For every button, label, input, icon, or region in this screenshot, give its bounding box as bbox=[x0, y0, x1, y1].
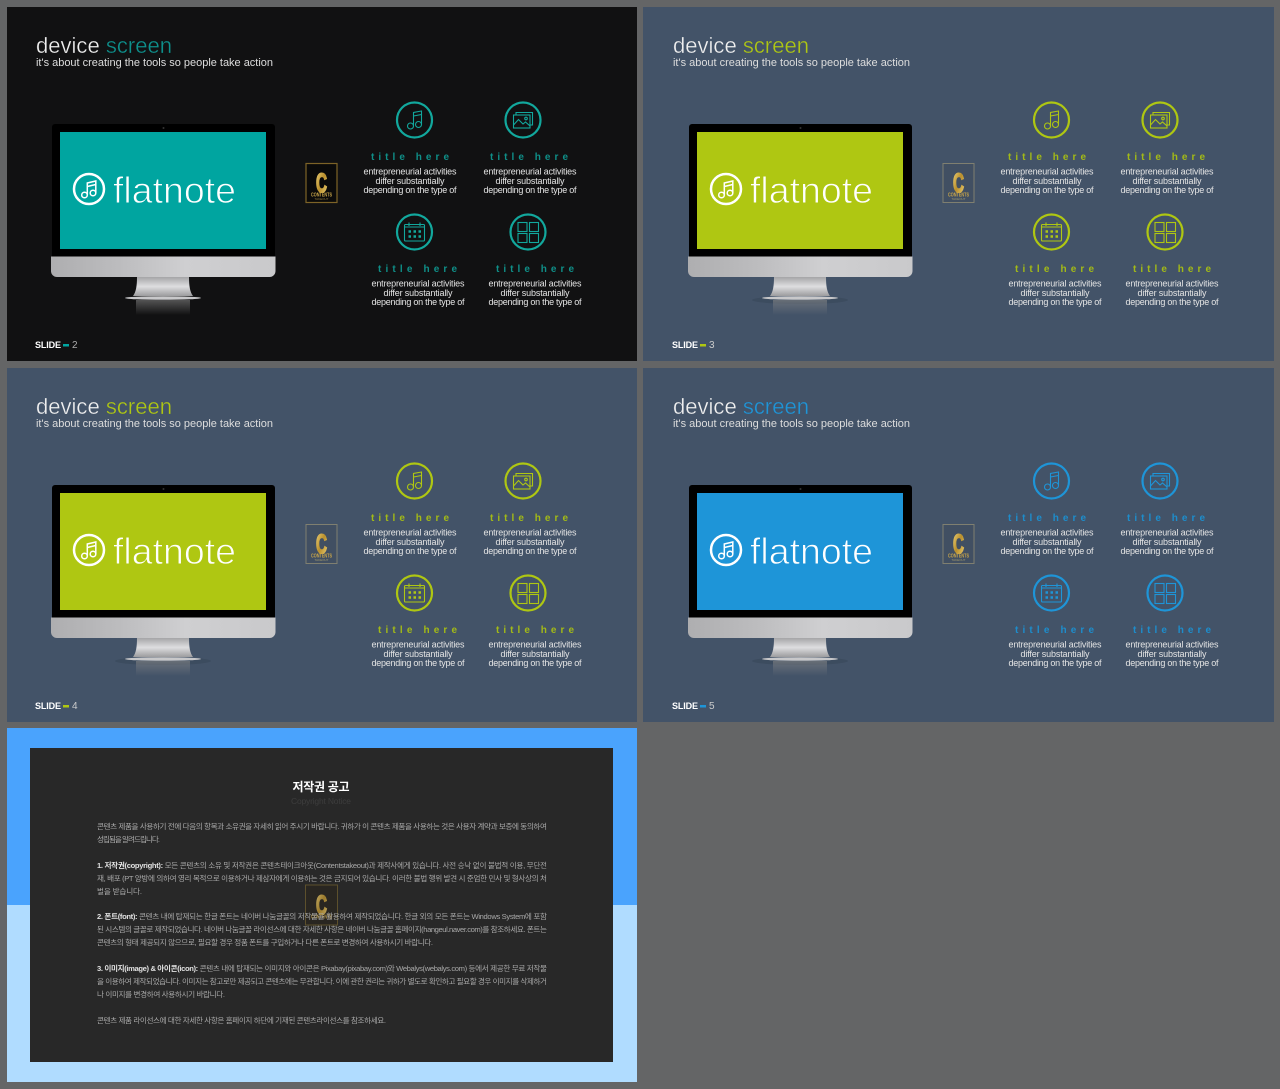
feature: calendar: title here bbox=[1015, 625, 1094, 636]
feature: calendar bbox=[372, 214, 465, 307]
feature: calendar: title here bbox=[378, 264, 457, 275]
feature: calendar: title here bbox=[1015, 264, 1094, 275]
monitor bbox=[51, 485, 276, 676]
panel: slide 2 teal on black bbox=[7, 7, 637, 361]
slide number: SLIDE bbox=[672, 701, 698, 711]
feature: image bbox=[1120, 464, 1214, 556]
notice subheading: Copyright Notice bbox=[291, 796, 351, 806]
watermark badge bbox=[306, 164, 337, 202]
feature: music: depending on the type of bbox=[1000, 546, 1094, 556]
notice section 2: 콘텐츠의 형태 제공되지 않으므로, 필요할 경우 정품 폰트를 구입하거나 다른 폰트로 변경하여 사용하시기 바랍니다. bbox=[97, 937, 433, 947]
watermark badge: TAKEOUT bbox=[314, 558, 329, 562]
feature: image: entrepreneurial activities bbox=[1120, 166, 1214, 176]
panel: slide 4 lime on slate bbox=[7, 368, 637, 722]
feature: music bbox=[1000, 464, 1094, 556]
feature: calendar: entrepreneurial activities bbox=[372, 640, 465, 650]
feature: music: depending on the type of bbox=[364, 546, 457, 556]
slide number: SLIDE bbox=[35, 701, 61, 711]
panel: slide 5 blue on slate bbox=[643, 368, 1274, 722]
feature: grid: title here bbox=[496, 625, 574, 636]
feature: image bbox=[1120, 102, 1214, 195]
feature: music: differ substantially bbox=[376, 537, 445, 547]
feature: grid: depending on the type of bbox=[1126, 658, 1219, 668]
feature: grid: differ substantially bbox=[1138, 288, 1207, 298]
feature: calendar bbox=[372, 576, 465, 668]
feature: image: title here bbox=[490, 513, 568, 524]
feature: calendar: depending on the type of bbox=[372, 658, 465, 668]
feature: image: title here bbox=[490, 152, 568, 163]
feature: calendar: entrepreneurial activities bbox=[1008, 640, 1102, 650]
notice footer line: 콘텐츠 제품 라이선스에 대한 자세한 사항은 홈페이지 하단에 기재된 콘텐츠라이선스를 참조하세요. bbox=[97, 1015, 386, 1025]
feature: music: differ substantially bbox=[376, 176, 445, 186]
watermark badge: CONTENTS bbox=[948, 554, 970, 560]
feature: music: entrepreneurial activities bbox=[1000, 166, 1094, 176]
watermark badge: TAKEOUT bbox=[952, 558, 966, 562]
notice section 2: 된 시스템의 글꼴로 제작되었습니다. 네이버 나눔글꼴 라이선스에 대한 자세한 사항은 네이버 나눔글꼴 홈페이지(hangeul.naver.com)를 참조하세요. 폰트는 bbox=[97, 924, 547, 934]
feature: image: differ substantially bbox=[1132, 176, 1202, 186]
feature: grid: entrepreneurial activities bbox=[488, 640, 582, 650]
subtitle: it's about creating the tools so people take action bbox=[36, 418, 273, 430]
slide number bbox=[35, 701, 78, 712]
notice heading: 저작권 공고 bbox=[292, 779, 350, 794]
watermark badge: CONTENTS bbox=[311, 914, 333, 920]
notice section 3: 을 이용하여 제작되었습니다. 이미지는 참고로만 제공되고 콘텐츠에는 무관합니다. 이에 관한 권리는 귀하가 별도로 확인하고 필요할 경우 이미지를 삭제하거 bbox=[97, 976, 547, 986]
feature: grid: title here bbox=[496, 264, 574, 275]
feature: image: depending on the type of bbox=[484, 185, 577, 195]
feature: music: entrepreneurial activities bbox=[364, 166, 457, 176]
notice section 1: 벌을 받습니다. bbox=[97, 886, 142, 896]
feature: music: title here bbox=[1008, 152, 1086, 163]
feature: calendar: depending on the type of bbox=[1008, 297, 1102, 307]
feature: grid bbox=[1126, 576, 1219, 668]
monitor bbox=[51, 124, 276, 315]
feature: music: title here bbox=[371, 152, 449, 163]
feature: calendar: differ substantially bbox=[1020, 649, 1090, 659]
notice intro: 콘텐츠 제품을 사용하기 전에 다음의 항목과 소유권을 자세히 읽어 주시기 바랍니다. 귀하가 이 콘텐츠 제품을 사용하는 것은 사용자 계약과 보증에 동의하여 bbox=[97, 821, 547, 831]
slide number: SLIDE bbox=[35, 340, 61, 350]
feature: image: title here bbox=[1127, 152, 1205, 163]
feature: image: differ substantially bbox=[496, 176, 565, 186]
feature: image bbox=[484, 464, 577, 556]
feature: music: title here bbox=[371, 513, 449, 524]
watermark badge: C bbox=[953, 529, 964, 559]
feature: grid bbox=[488, 214, 582, 307]
feature: grid: title here bbox=[1133, 264, 1211, 275]
subtitle: it's about creating the tools so people take action bbox=[673, 57, 910, 69]
feature: image: depending on the type of bbox=[1120, 185, 1214, 195]
feature: image: entrepreneurial activities bbox=[484, 166, 577, 176]
feature: calendar: depending on the type of bbox=[372, 297, 465, 307]
feature: grid: differ substantially bbox=[500, 288, 570, 298]
screen logo: flatnote bbox=[113, 531, 236, 572]
watermark badge: CONTENTS bbox=[311, 192, 333, 198]
notice section 3 bbox=[97, 963, 547, 999]
watermark badge: TAKEOUT bbox=[952, 197, 966, 201]
watermark badge bbox=[943, 524, 974, 564]
notice section 1 bbox=[97, 860, 547, 896]
feature: image bbox=[484, 102, 577, 195]
notice section 3: 나 이미지를 변경하여 사용하시기 바랍니다. bbox=[97, 989, 225, 999]
screen logo: flatnote bbox=[750, 170, 873, 211]
watermark badge: TAKEOUT bbox=[314, 197, 329, 201]
watermark badge: C bbox=[953, 168, 964, 198]
slide number: 5 bbox=[709, 701, 715, 712]
feature: image: entrepreneurial activities bbox=[1120, 528, 1214, 538]
feature: calendar: depending on the type of bbox=[1008, 658, 1102, 668]
slide number bbox=[35, 340, 78, 351]
title: device screen bbox=[673, 33, 809, 58]
notice intro bbox=[97, 821, 547, 844]
slide number: 2 bbox=[72, 340, 78, 351]
feature: image: title here bbox=[1127, 513, 1205, 524]
feature: music: differ substantially bbox=[1012, 176, 1082, 186]
watermark badge: C bbox=[316, 168, 327, 198]
feature: music bbox=[1000, 102, 1094, 195]
notice section 2 bbox=[97, 911, 547, 947]
watermark badge bbox=[943, 164, 974, 202]
screen logo: flatnote bbox=[113, 170, 236, 211]
slide number bbox=[672, 340, 715, 351]
slide number: 3 bbox=[709, 340, 715, 351]
title: device screen bbox=[36, 33, 172, 58]
subtitle: it's about creating the tools so people take action bbox=[673, 418, 910, 430]
feature: music: entrepreneurial activities bbox=[1000, 528, 1094, 538]
feature: grid: entrepreneurial activities bbox=[1126, 640, 1219, 650]
watermark badge bbox=[306, 524, 337, 564]
feature: music: depending on the type of bbox=[364, 185, 457, 195]
screen logo: flatnote bbox=[750, 531, 873, 572]
feature: music bbox=[364, 102, 457, 195]
feature: grid: differ substantially bbox=[500, 649, 570, 659]
watermark badge: CONTENTS bbox=[948, 192, 970, 198]
feature: grid bbox=[488, 576, 582, 668]
feature: image: differ substantially bbox=[496, 537, 565, 547]
watermark badge: C bbox=[316, 529, 327, 559]
notice section 1: 1. 저작권(copyright): 모든 콘텐츠의 소유 및 저작권은 콘텐츠테이크아웃(Contentstakeout)과 제작사에게 있습니다. 사전 승낙 없이 불법적 이용, 무단전 bbox=[97, 860, 547, 870]
notice section 3: 3. 이미지(image) & 아이콘(icon): 콘텐츠 내에 탑재되는 이미지와 아이콘은 Pixabay(pixabay.com)와 Webalys(webalys.com) 등에서 제공한 무료 저작물 bbox=[97, 963, 547, 973]
feature: music: depending on the type of bbox=[1000, 185, 1094, 195]
feature: calendar: differ substantially bbox=[384, 649, 453, 659]
feature: calendar: entrepreneurial activities bbox=[1008, 278, 1102, 288]
feature: grid: depending on the type of bbox=[488, 297, 582, 307]
feature: music: entrepreneurial activities bbox=[364, 528, 457, 538]
notice section 1: 재, 배포 (PT 양방에 의하여 영리 목적으로 이용하거나 제삼자에게 이용하는 것은 금지되어 있습니다. 이러한 불법 행위 발견 시 준엄한 민사 및 형사상의 처 bbox=[97, 873, 547, 883]
feature: image: depending on the type of bbox=[1120, 546, 1214, 556]
panel: copyright notice slide bbox=[7, 728, 637, 1082]
feature: grid: depending on the type of bbox=[1126, 297, 1219, 307]
feature: music: title here bbox=[1008, 513, 1086, 524]
slide number: SLIDE bbox=[672, 340, 698, 350]
feature: grid: entrepreneurial activities bbox=[488, 278, 582, 288]
notice section 2: 2. 폰트(font): 콘텐츠 내에 탑재되는 한글 폰트는 네이버 나눔글꼴의 저작물을 활용하여 제작되었습니다. 한글 외의 모든 폰트는 Windows System에 포함 bbox=[97, 911, 547, 921]
feature: music: differ substantially bbox=[1012, 537, 1082, 547]
watermark badge: CONTENTS bbox=[311, 554, 333, 560]
feature: calendar: entrepreneurial activities bbox=[372, 278, 465, 288]
feature: grid: depending on the type of bbox=[488, 658, 582, 668]
slide number bbox=[672, 701, 715, 712]
watermark badge: C bbox=[316, 890, 327, 920]
panel: slide 3 lime on slate bbox=[643, 7, 1274, 361]
title: device screen bbox=[36, 394, 172, 419]
feature: calendar: title here bbox=[378, 625, 457, 636]
feature: image: differ substantially bbox=[1132, 537, 1202, 547]
feature: grid bbox=[1126, 214, 1219, 307]
feature: grid: differ substantially bbox=[1138, 649, 1207, 659]
feature: grid: title here bbox=[1133, 625, 1211, 636]
feature: music bbox=[364, 464, 457, 556]
watermark badge bbox=[306, 885, 338, 925]
notice intro: 성립됨을 알려드립니다. bbox=[97, 834, 160, 844]
slide number: 4 bbox=[72, 701, 78, 712]
monitor bbox=[688, 124, 912, 315]
feature: calendar: differ substantially bbox=[1020, 288, 1090, 298]
feature: image: depending on the type of bbox=[484, 546, 577, 556]
feature: calendar bbox=[1008, 214, 1102, 307]
feature: grid: entrepreneurial activities bbox=[1126, 278, 1219, 288]
feature: calendar bbox=[1008, 576, 1102, 668]
feature: calendar: differ substantially bbox=[384, 288, 453, 298]
title: device screen bbox=[673, 394, 809, 419]
feature: image: entrepreneurial activities bbox=[484, 528, 577, 538]
monitor bbox=[688, 485, 912, 676]
subtitle: it's about creating the tools so people take action bbox=[36, 57, 273, 69]
